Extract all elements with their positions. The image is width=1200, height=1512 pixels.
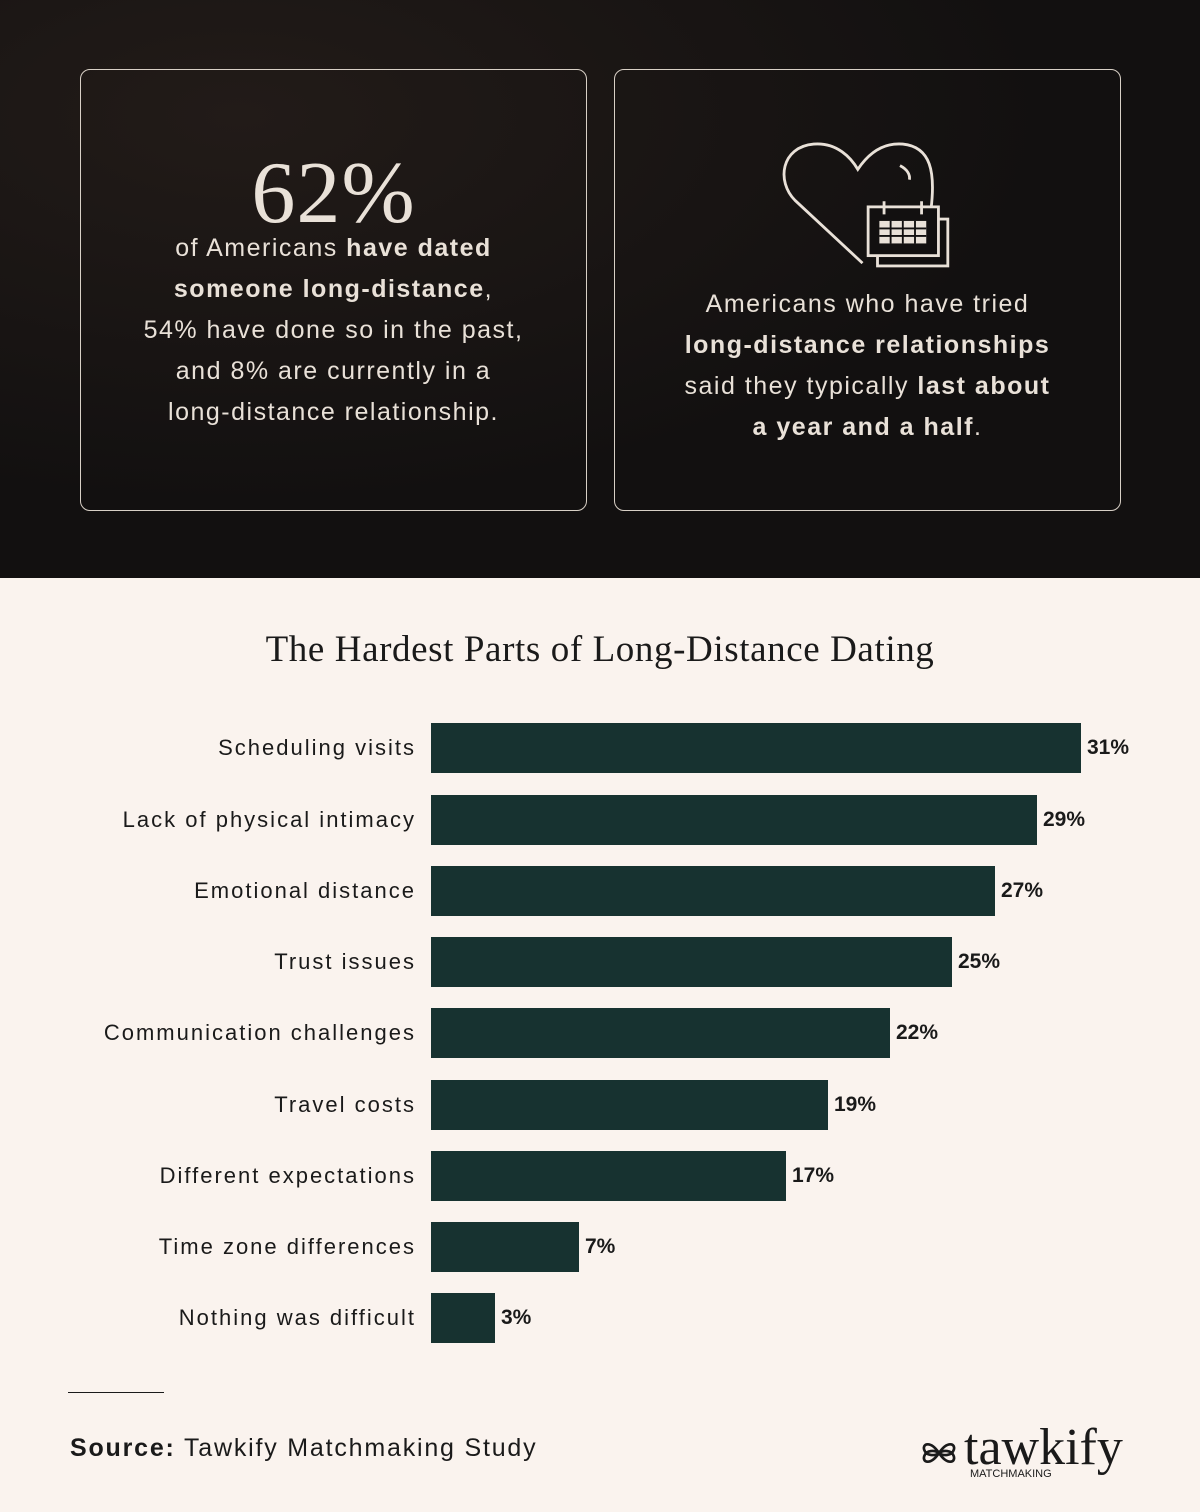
panel: duration stat (614, 69, 1121, 511)
stat text: and 8% are currently in a (176, 357, 491, 385)
stat text: a year and a half. (753, 413, 982, 441)
stat text: 54% have done so in the past, (144, 316, 523, 344)
stat text (144, 234, 523, 426)
source: Source: Tawkify Matchmaking Study (70, 1434, 537, 1462)
bar chart: Emotional distance (194, 878, 416, 903)
logo: MATCHMAKING (970, 1468, 1052, 1480)
bar chart: Travel costs (274, 1092, 416, 1117)
bar chart: 19% (834, 1093, 876, 1116)
stat text: long-distance relationship. (168, 398, 499, 426)
bar chart: 22% (896, 1021, 938, 1044)
stat text (685, 290, 1050, 441)
bar chart: Scheduling visits (218, 735, 416, 760)
bar chart: 31% (1087, 736, 1129, 759)
stat text: long-distance relationships (685, 331, 1050, 359)
bar chart: 29% (1043, 808, 1085, 831)
bar chart: 27% (1001, 879, 1043, 902)
stat text: of Americans have dated (175, 234, 492, 262)
stat text: someone long-distance, (174, 275, 493, 303)
chart title: The Hardest Parts of Long-Distance Dating (266, 629, 934, 670)
big number: 62% (251, 145, 416, 242)
icon: heart with calendar (782, 142, 950, 268)
bar chart: 25% (958, 950, 1000, 973)
bar chart: Communication challenges (104, 1020, 416, 1045)
bar chart (104, 723, 1129, 1343)
bar chart: 7% (585, 1235, 615, 1258)
bar chart: Time zone differences (159, 1234, 416, 1259)
panel: 62% stat (80, 69, 587, 511)
bar chart: Trust issues (274, 949, 416, 974)
bar chart: Lack of physical intimacy (123, 807, 416, 832)
stat text: Americans who have tried (706, 290, 1029, 318)
bar chart: 3% (501, 1306, 531, 1329)
bar chart: 17% (792, 1164, 834, 1187)
logo: tawkify (964, 1419, 1123, 1476)
bar chart: Different expectations (160, 1163, 416, 1188)
top dark section (0, 0, 1200, 578)
stat text: said they typically last about (685, 372, 1050, 400)
bar chart: Nothing was difficult (179, 1305, 416, 1330)
